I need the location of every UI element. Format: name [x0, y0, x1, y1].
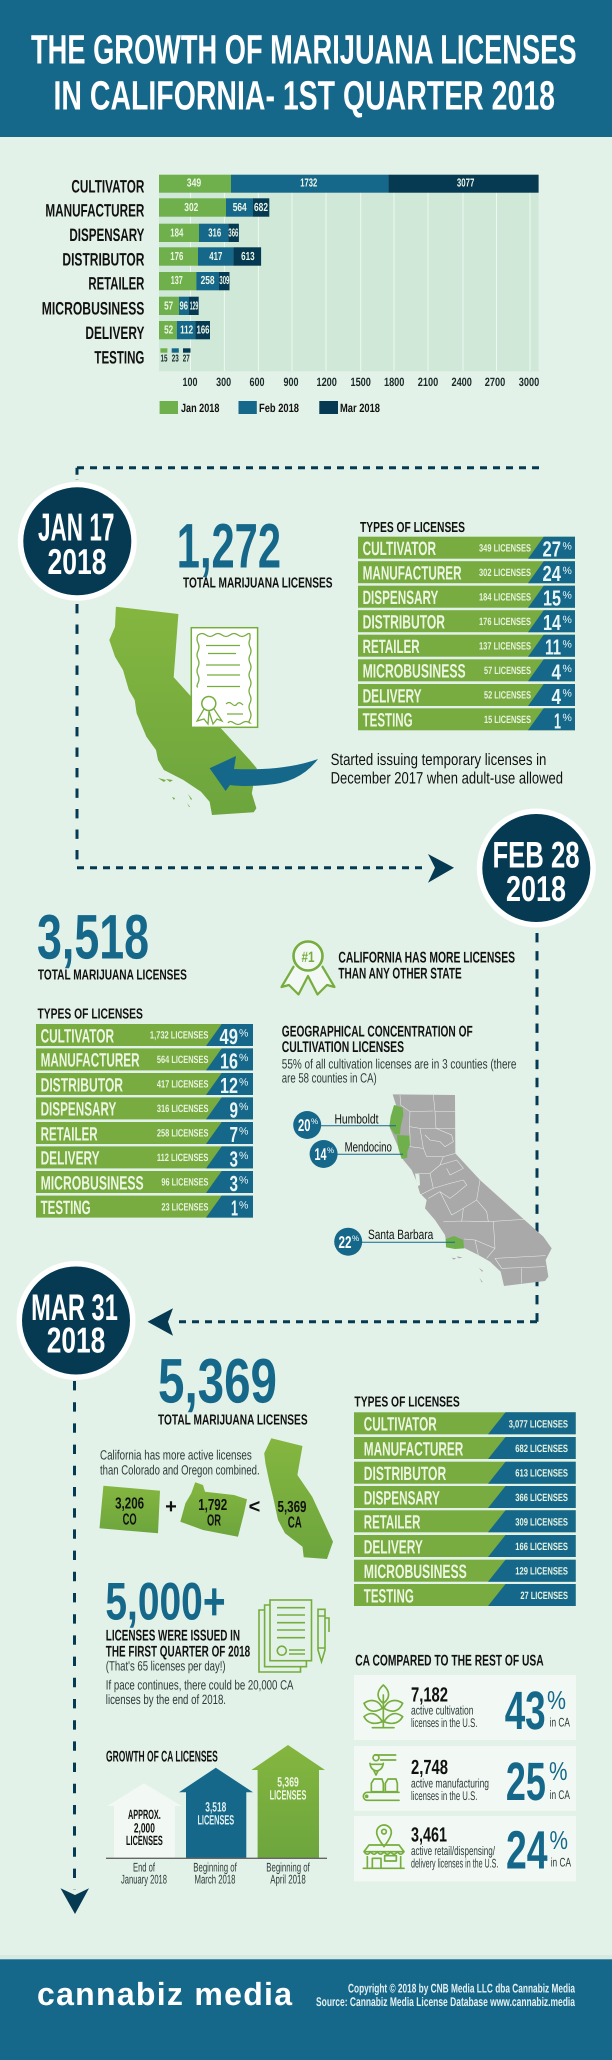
stat: 5,000+ licenses issued: LICENSES WERE ISSUED IN [106, 1628, 240, 1645]
arrow bar: April: Beginning of [266, 1861, 310, 1875]
card: cultivation [354, 1675, 576, 1741]
arrow bar: March [179, 1768, 253, 1886]
card: cultivation: licenses in the U.S. [411, 1716, 477, 1730]
arrow bar: January: APPROX. [128, 1807, 161, 1822]
heading: TYPES OF LICENSES [360, 520, 465, 536]
card: retail: 24 [506, 1820, 548, 1880]
row: cultivator: CULTIVATOR [364, 1415, 437, 1436]
card: manufacturing: licenses in the U.S. [411, 1789, 477, 1803]
row: distributor: 14 [543, 610, 561, 635]
row: dispensary: 316 LICENSES [157, 1103, 208, 1115]
row: cultivator: 1,732 LICENSES [150, 1030, 208, 1042]
row: dispensary: DISPENSARY [363, 588, 438, 609]
row: cultivator: % [239, 1028, 248, 1040]
row: retailer: % [562, 638, 572, 650]
title [31, 26, 576, 118]
bar: cultivator [159, 175, 539, 193]
bar: microbusiness [159, 297, 199, 315]
bar: manufacturer: 682 [254, 201, 268, 214]
row: dispensary: % [239, 1101, 248, 1113]
callout: Mendocino 14% [310, 1140, 403, 1168]
stat: 5,369 total licenses: 5,369 [158, 1347, 277, 1417]
bar: testing: 23 [172, 353, 179, 364]
row: retailer: 11 [545, 635, 561, 660]
legend: Mar 2018 [340, 401, 380, 415]
row: testing: 27 LICENSES [520, 1590, 568, 1602]
heading: TYPES OF LICENSES [354, 1394, 460, 1410]
stat: 5,369 total licenses: TOTAL MARIJUANA LICENSES [158, 1413, 308, 1429]
row: microbusiness: 4 [552, 659, 561, 684]
row: dispensary: 366 LICENSES [515, 1492, 568, 1504]
card: retail: % [550, 1825, 568, 1855]
card: cultivation: % [547, 1685, 566, 1715]
timeline path: Feb to Mar [148, 933, 537, 1336]
row: delivery [358, 684, 575, 709]
bar: cultivator: 1732 [300, 177, 317, 190]
callout: Santa Barbara 22%: 22 [338, 1233, 352, 1252]
card: retail [354, 1816, 576, 1881]
icon: certificate [191, 628, 258, 727]
bar: retailer: 309 [219, 274, 230, 287]
row: delivery: 112 LICENSES [157, 1152, 208, 1164]
callout: California number one: CALIFORNIA HAS MORE LICENSES [338, 950, 515, 967]
callout: Humboldt 20%: 20 [298, 1116, 310, 1135]
stacked bar chart: licenses by type: 129 [190, 299, 198, 312]
arrow bar: April [251, 1745, 325, 1886]
bar: dispensary: 316 [208, 227, 222, 240]
row: microbusiness: MICROBUSINESS [364, 1562, 467, 1583]
row: testing [36, 1196, 253, 1221]
text: geographical concentration: GEOGRAPHICAL CONCENTRATION OF [282, 1024, 473, 1041]
axis labels: 1500 [350, 375, 371, 389]
table: types of licenses Jan [358, 520, 575, 733]
state: Colorado: 3,206 [115, 1495, 144, 1512]
icon: #1 ribbon [282, 942, 334, 994]
row: microbusiness: % [562, 663, 572, 675]
row: distributor [354, 1462, 576, 1485]
bar: delivery [159, 321, 210, 339]
California shape [109, 607, 257, 815]
row: distributor: % [562, 614, 572, 626]
row: delivery: % [239, 1150, 248, 1162]
row: delivery: 166 LICENSES [515, 1541, 568, 1553]
icon: #1 ribbon: #1 [302, 949, 314, 966]
bar: manufacturer [159, 198, 269, 217]
axis labels: 2100 [418, 375, 438, 389]
row: retailer [358, 635, 575, 660]
arrow bar: April: 5,369 [277, 1775, 299, 1790]
bar: cultivator: 3077 [457, 177, 474, 190]
row: cultivator: 349 LICENSES [479, 542, 531, 554]
stat: 5,000+ licenses issued: (That's 65 licenses per day!) [106, 1659, 226, 1674]
arrow bar: January: 2,000 [134, 1820, 155, 1835]
stat: 3,518 total licenses: 3,518 [37, 902, 149, 972]
row: retailer: % [239, 1126, 248, 1138]
bar: retailer: 137 [171, 274, 183, 287]
stat: 1,272 total licenses: TOTAL MARIJUANA LICENSES [183, 576, 333, 592]
row: delivery: DELIVERY [364, 1537, 423, 1558]
stat: 3,518 total licenses: TOTAL MARIJUANA LICENSES [38, 967, 187, 983]
row: microbusiness [358, 659, 575, 684]
row: microbusiness [354, 1560, 576, 1583]
axis labels: 900 [284, 375, 299, 389]
row: delivery: 4 [552, 684, 561, 709]
text: geographical concentration [282, 1024, 516, 1086]
row: testing: TESTING [41, 1198, 91, 1219]
row: microbusiness: MICROBUSINESS [363, 662, 466, 683]
state: Oregon [180, 1482, 247, 1537]
bar: testing: 15 [160, 353, 168, 364]
callout: Mendocino 14%: % [327, 1146, 334, 1155]
row: manufacturer: % [239, 1052, 248, 1064]
icon: plant [364, 1685, 403, 1728]
arrow bar: March: March 2018 [194, 1872, 236, 1886]
row: distributor [36, 1073, 253, 1098]
county: Humboldt [389, 1105, 403, 1134]
callout: Humboldt 20% [293, 1111, 396, 1139]
row: manufacturer [354, 1437, 576, 1460]
comparison: CA vs Colorado and Oregon: California has more active licenses [100, 1447, 252, 1462]
heading: GROWTH OF CA LICENSES [106, 1749, 218, 1766]
heading: TYPES OF LICENSES [38, 1007, 143, 1023]
text: geographical concentration: 55% of all cultivation licenses are in 3 counties (there [282, 1056, 516, 1071]
county: Santa Barbara [446, 1236, 464, 1249]
row: manufacturer: 302 LICENSES [479, 567, 531, 579]
date badge: Jan 17 2018 [18, 482, 137, 601]
row: distributor: 12 [220, 1073, 238, 1098]
symbol: plus: + [165, 1496, 177, 1518]
row: manufacturer: % [562, 565, 572, 577]
row: retailer [354, 1510, 576, 1534]
comparison: CA vs Colorado and Oregon: than Colorado and Oregon combined. [100, 1462, 260, 1477]
category labels: TESTING [94, 348, 144, 368]
callout: California number one: THAN ANY OTHER STATE [338, 966, 462, 983]
arrow bar: March: Beginning of [193, 1861, 237, 1875]
row: cultivator [358, 537, 575, 562]
axis labels: 3000 [519, 375, 539, 389]
row: manufacturer: MANUFACTURER [41, 1051, 140, 1072]
callout: Humboldt 20%: % [311, 1117, 318, 1126]
row: distributor [358, 610, 575, 635]
row: testing [354, 1584, 576, 1607]
county: Mendocino [397, 1135, 410, 1159]
row: distributor: 417 LICENSES [157, 1079, 208, 1091]
card: cultivation: in CA [550, 1716, 570, 1730]
row: dispensary: 9 [230, 1097, 238, 1122]
row: testing: TESTING [364, 1586, 414, 1607]
row: dispensary: DISPENSARY [364, 1488, 440, 1509]
arrow: to Feb [428, 854, 454, 883]
stat: 1,272 total licenses: 1,272 [177, 512, 281, 582]
card: retail: active retail/dispensing/ [411, 1844, 495, 1858]
row: testing: 1 [554, 708, 561, 733]
row: cultivator: CULTIVATOR [41, 1026, 114, 1047]
card: manufacturing: active manufacturing [411, 1776, 489, 1790]
row: cultivator: 3,077 LICENSES [509, 1418, 568, 1430]
state: Colorado [100, 1486, 160, 1533]
category labels: MICROBUSINESS [42, 299, 144, 319]
card: manufacturing: in CA [550, 1788, 570, 1802]
row: dispensary [358, 586, 575, 611]
row: retailer: 309 LICENSES [515, 1516, 568, 1528]
row: manufacturer: 16 [220, 1048, 238, 1073]
callout: California number one [282, 942, 515, 994]
row: microbusiness [36, 1171, 253, 1196]
map: California with certificate [109, 607, 318, 815]
stat: 5,000+ licenses issued [105, 1572, 294, 1707]
stat: 5,000+ licenses issued: If pace continues, there could be 20,000 CA [106, 1677, 294, 1692]
comparison: CA vs Colorado and Oregon [100, 1438, 333, 1559]
row: cultivator: 49 [220, 1024, 238, 1049]
row: manufacturer [36, 1048, 253, 1073]
row: distributor: 176 LICENSES [479, 616, 531, 628]
bar: testing [160, 348, 190, 364]
bar: retailer [159, 272, 230, 290]
stat: 5,000+ licenses issued: licenses by the end of 2018. [106, 1692, 226, 1707]
bar: manufacturer: 564 [233, 201, 247, 214]
row: manufacturer: 564 LICENSES [157, 1054, 208, 1066]
bar: testing: 27 [183, 353, 190, 364]
header banner [0, 0, 612, 137]
category labels: DELIVERY [85, 323, 144, 343]
table: types of licenses Feb [36, 1007, 253, 1221]
row: testing [358, 708, 575, 733]
row: manufacturer [358, 561, 575, 586]
row: testing: TESTING [363, 711, 413, 732]
arrow bar: January: End of [133, 1861, 155, 1875]
bar: delivery: 52 [164, 323, 173, 336]
row: cultivator: CULTIVATOR [363, 539, 436, 560]
arrow bar: March: 3,518 [205, 1800, 227, 1815]
legend: Jan 2018 [181, 401, 220, 415]
date badge: Mar 31 2018: MAR 31 [31, 1287, 118, 1328]
callout: Santa Barbara 22% [334, 1227, 455, 1256]
row: microbusiness: % [239, 1175, 248, 1187]
row: cultivator [36, 1024, 253, 1049]
axis labels: 300 [216, 375, 231, 389]
state: Oregon: 1,792 [198, 1497, 227, 1514]
row: dispensary [36, 1097, 253, 1122]
category labels: CULTIVATOR [71, 176, 144, 196]
icon: store with pin [363, 1825, 404, 1868]
panel: CA compared to rest of USA [354, 1653, 576, 1881]
arrow bar: January: January 2018 [121, 1872, 167, 1886]
row: microbusiness: 3 [230, 1171, 238, 1196]
stat: 5,000+ licenses issued: 5,000+ [105, 1572, 226, 1631]
row: distributor: DISTRIBUTOR [364, 1464, 446, 1485]
row: dispensary: 184 LICENSES [479, 591, 531, 603]
row: delivery: 3 [230, 1146, 238, 1171]
state: California: CA [288, 1514, 302, 1531]
callout: Humboldt 20%: Humboldt [334, 1111, 379, 1126]
row: testing: 15 LICENSES [484, 714, 531, 726]
state: Colorado: CO [123, 1511, 137, 1528]
card: retail: 3,461 [411, 1823, 447, 1846]
map: California counties [293, 1094, 552, 1286]
bar: distributor: 417 [209, 250, 222, 263]
row: manufacturer: 682 LICENSES [515, 1443, 568, 1455]
row: retailer: RETAILER [41, 1124, 98, 1145]
row: testing: 23 LICENSES [161, 1201, 208, 1213]
row: testing: 1 [231, 1196, 238, 1221]
bar: delivery: 166 [196, 323, 210, 336]
row: microbusiness: MICROBUSINESS [41, 1173, 144, 1194]
icon: documents and pencil [259, 1600, 329, 1672]
stacked bar chart: licenses by type [42, 175, 539, 415]
card: manufacturing: % [549, 1756, 568, 1786]
row: retailer: RETAILER [364, 1513, 420, 1534]
bar: manufacturer: 302 [184, 201, 198, 214]
row: cultivator [354, 1412, 576, 1436]
row: manufacturer: 24 [542, 561, 561, 586]
row: distributor: DISTRIBUTOR [363, 613, 445, 634]
row: delivery: DELIVERY [363, 686, 422, 707]
category labels: MANUFACTURER [45, 201, 144, 221]
callout: Santa Barbara 22%: % [352, 1234, 359, 1243]
chart: growth of CA licenses [106, 1745, 327, 1886]
bar: distributor: 613 [241, 250, 255, 263]
bar: dispensary [159, 224, 239, 242]
bar: retailer: 258 [201, 274, 215, 287]
arrow bar: January: LICENSES [126, 1833, 163, 1848]
card: retail: in CA [551, 1856, 572, 1870]
row: cultivator: 27 [542, 537, 561, 562]
arrow: down [60, 1888, 89, 1914]
card: retail: delivery licenses in the U.S. [411, 1857, 498, 1871]
copyright and source [316, 1982, 576, 2009]
row: retailer: 7 [230, 1122, 238, 1147]
row: distributor: DISTRIBUTOR [41, 1075, 123, 1096]
text: geographical concentration: CULTIVATION LICENSES [282, 1039, 404, 1056]
axis labels: 100 [182, 375, 198, 389]
axis labels: 2400 [451, 375, 472, 389]
timeline path: Jan to Feb [77, 468, 544, 883]
arrow bar: April: April 2018 [270, 1872, 306, 1886]
arrow bar: January [107, 1783, 182, 1886]
axis labels: 1200 [316, 375, 337, 389]
arrow bar: April: LICENSES [270, 1787, 306, 1802]
row: retailer: 258 LICENSES [157, 1128, 208, 1140]
row: manufacturer: MANUFACTURER [364, 1439, 463, 1460]
bar: cultivator: 349 [187, 177, 202, 190]
row: testing: % [562, 712, 572, 724]
category labels [42, 176, 144, 368]
bar: microbusiness: 57 [164, 299, 173, 312]
axis labels: 2700 [485, 375, 505, 389]
row: retailer: 137 LICENSES [479, 640, 531, 652]
note: temporary licenses: Started issuing temporary licenses in [331, 751, 546, 769]
row: microbusiness: 57 LICENSES [484, 665, 531, 677]
row: delivery: 52 LICENSES [484, 690, 531, 702]
row: delivery [36, 1146, 253, 1171]
card: cultivation: active cultivation [411, 1703, 474, 1717]
timeline path: Mar onward [60, 1381, 89, 1914]
category labels: DISPENSARY [69, 225, 144, 245]
card: manufacturing: 25 [506, 1752, 546, 1812]
card: manufacturing [354, 1746, 576, 1812]
symbol: less than: < [249, 1496, 260, 1518]
state: California: 5,369 [278, 1499, 307, 1516]
date badge: Feb 28 2018: 2018 [506, 868, 566, 909]
bar: dispensary: 184 [170, 227, 184, 240]
note: temporary licenses [331, 751, 563, 787]
row: distributor: 613 LICENSES [515, 1468, 568, 1480]
callout: Mendocino 14%: Mendocino [345, 1140, 392, 1155]
row: delivery: % [562, 688, 572, 700]
row: distributor: % [239, 1077, 248, 1089]
row: delivery: DELIVERY [41, 1149, 100, 1170]
card: cultivation: 7,182 [411, 1684, 448, 1707]
row: cultivator: % [562, 540, 572, 552]
card: cultivation: 43 [505, 1681, 546, 1741]
bar: distributor: 176 [170, 250, 184, 263]
date badge: Jan 17 2018: JAN 17 [38, 507, 114, 550]
state: Oregon: OR [207, 1512, 221, 1529]
row: retailer: RETAILER [363, 637, 420, 658]
bar: microbusiness: 96 [180, 299, 188, 312]
row: manufacturer: MANUFACTURER [363, 564, 462, 585]
card: manufacturing: 2,748 [411, 1756, 448, 1779]
callout: Mendocino 14%: 14 [314, 1145, 327, 1164]
axis labels [182, 375, 539, 389]
category labels: RETAILER [88, 274, 144, 294]
row: microbusiness: 96 LICENSES [161, 1177, 208, 1189]
stat: 5,000+ licenses issued: THE FIRST QUARTER OF 2018 [106, 1644, 250, 1661]
icon: factory [363, 1755, 399, 1800]
callout: Santa Barbara 22%: Santa Barbara [368, 1227, 434, 1242]
row: dispensary: % [562, 589, 572, 601]
row: testing: % [239, 1199, 248, 1211]
date badge: Feb 28 2018 [477, 808, 596, 928]
legend [160, 401, 380, 415]
bar: delivery: 112 [180, 323, 193, 336]
row: retailer [36, 1122, 253, 1147]
row: dispensary: DISPENSARY [41, 1100, 116, 1121]
date badge: Mar 31 2018: 2018 [47, 1320, 105, 1361]
legend: Feb 2018 [259, 401, 299, 415]
text: geographical concentration: are 58 counties in CA) [282, 1071, 377, 1086]
arrow: to Mar [148, 1308, 173, 1336]
bar: dispensary: 366 [228, 227, 239, 240]
row: dispensary [354, 1486, 576, 1509]
row: delivery [354, 1535, 576, 1558]
arrow bar: March: LICENSES [197, 1812, 234, 1827]
logo wordmark: cannabiz media [37, 1976, 292, 2012]
date badge: Mar 31 2018 [16, 1261, 136, 1380]
footer [0, 1955, 612, 2060]
axis labels: 600 [250, 375, 265, 389]
row: dispensary: 15 [543, 586, 561, 611]
bar: distributor [159, 247, 261, 266]
arrow: curved pointer [210, 756, 318, 791]
row: microbusiness: 129 LICENSES [515, 1566, 568, 1578]
state: California [264, 1438, 333, 1559]
date badge: Jan 17 2018: 2018 [48, 541, 106, 582]
category labels: DISTRIBUTOR [62, 250, 144, 270]
axis labels: 1800 [384, 375, 405, 389]
table: types of licenses Mar [354, 1394, 576, 1607]
